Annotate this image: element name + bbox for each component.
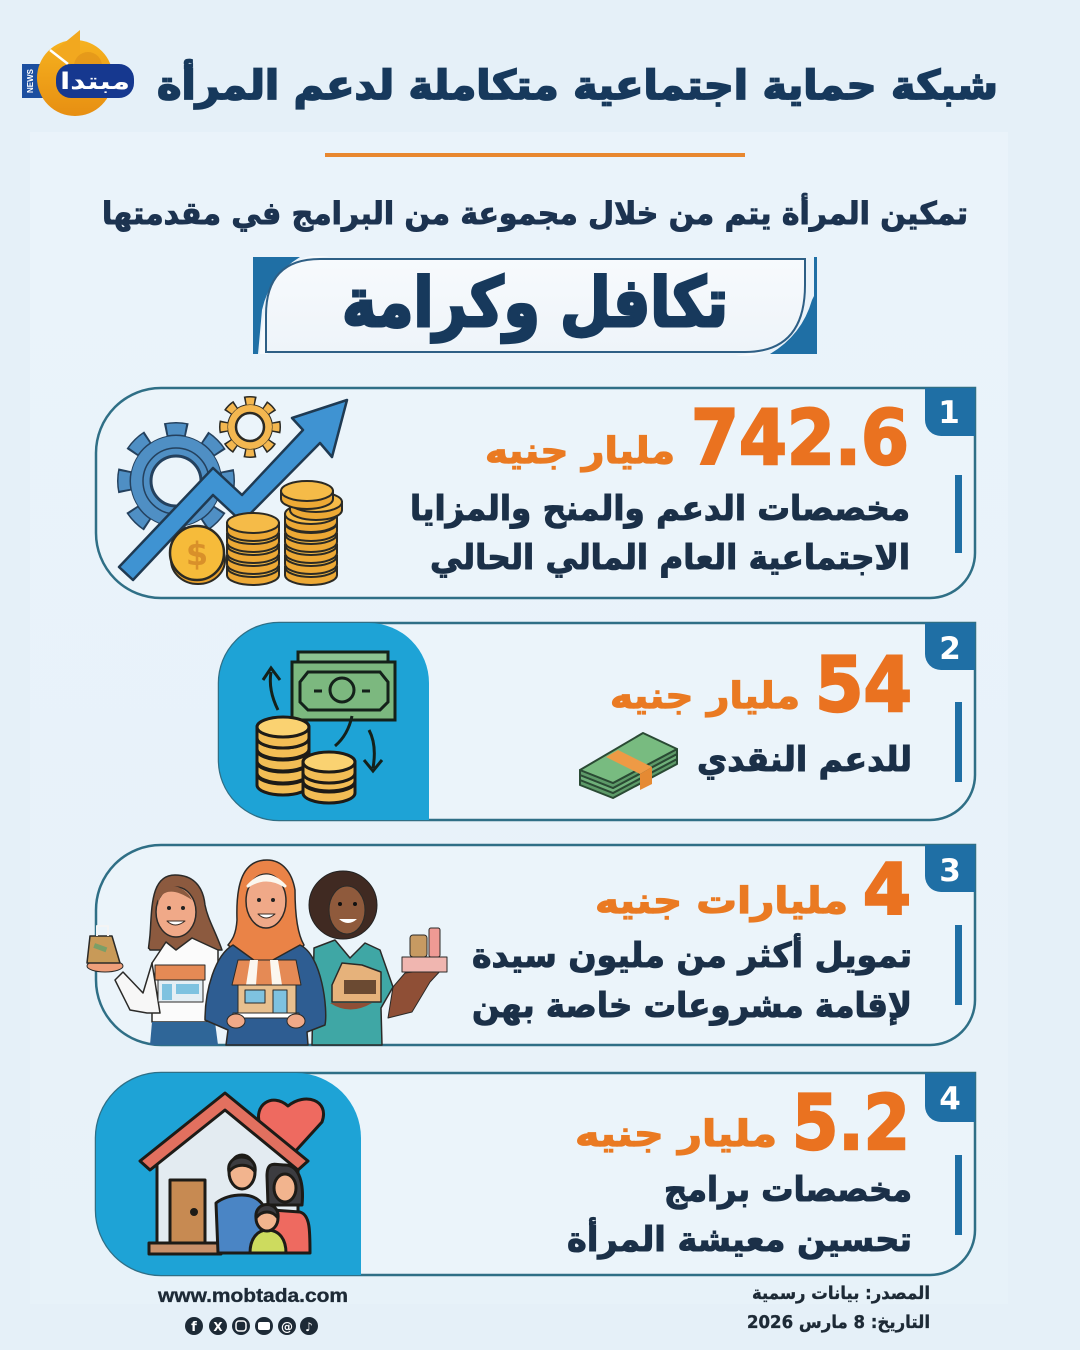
unit label: مليار جنيه	[610, 676, 800, 717]
number tab 4: 4	[939, 1081, 961, 1117]
social icons: ♪	[305, 1320, 313, 1334]
social icons: @	[281, 1320, 293, 1334]
panel: card 1	[96, 388, 975, 598]
description: للدعم النقدي	[697, 740, 912, 780]
description line 2: لإقامة مشروعات خاصة بهن	[472, 986, 912, 1026]
description line 2: الاجتماعية العام المالي الحالي	[430, 538, 910, 578]
description line 1: مخصصات برامج	[664, 1170, 912, 1210]
icon: cash and coins	[257, 652, 395, 803]
source note: المصدر: بيانات رسمية	[752, 1283, 930, 1304]
title: شبكة حماية اجتماعية متكاملة لدعم المرأة	[157, 59, 998, 109]
banner: program name	[253, 256, 817, 356]
social icons: X	[213, 1320, 223, 1334]
center light panel	[30, 132, 1008, 1304]
panel: card 2	[219, 623, 975, 820]
figure 742.6: 742.6	[691, 393, 909, 482]
figure 54: 54	[815, 640, 912, 729]
website url: www.mobtada.com	[157, 1286, 348, 1307]
date note: التاريخ: 8 مارس 2026	[747, 1312, 930, 1333]
number tab 1	[925, 388, 975, 436]
subtitle: تمكين المرأة يتم من خلال مجموعة من البرامج في مقدمتها	[102, 193, 968, 232]
unit label: مليار جنيه	[575, 1114, 777, 1155]
description line 1: مخصصات الدعم والمنح والمزايا	[410, 489, 910, 529]
banner: program name: تكافل وكرامة	[342, 264, 728, 343]
icon: gears, arrow and coins: $	[186, 535, 208, 573]
side accent	[955, 1155, 962, 1235]
unit label: مليار جنيه	[485, 431, 675, 472]
side accent	[955, 925, 962, 1005]
number tab 4	[925, 1073, 975, 1122]
description line 2: تحسين معيشة المرأة	[567, 1217, 912, 1260]
blue icon tile	[219, 623, 429, 820]
social icons: f	[191, 1320, 197, 1335]
number tab 3: 3	[939, 853, 961, 889]
icon: gears, arrow and coins	[119, 400, 347, 585]
unit label: مليارات جنيه	[595, 881, 848, 922]
woman left	[87, 875, 222, 1045]
woman centre	[205, 860, 326, 1045]
icon: family home with heart	[140, 1093, 324, 1254]
social icons	[185, 1317, 318, 1335]
panel: card 3	[87, 845, 975, 1045]
panel: card 4	[96, 1073, 975, 1275]
description line 1: تمويل أكثر من مليون سيدة	[472, 933, 912, 976]
illustration: three women entrepreneurs	[87, 860, 447, 1045]
figure 5.2: 5.2	[792, 1078, 910, 1167]
number tab 2	[925, 623, 975, 670]
blue icon tile	[96, 1073, 361, 1275]
logo: NEWS	[26, 68, 35, 93]
number tab 3	[925, 845, 975, 892]
title divider	[325, 153, 745, 157]
side accent	[955, 475, 962, 553]
logo: مبتدا	[60, 69, 130, 95]
side accent	[955, 702, 962, 782]
woman right	[309, 871, 447, 1045]
figure 4: 4	[863, 849, 911, 931]
number tab 2: 2	[939, 631, 961, 667]
icon: money stack	[580, 733, 677, 798]
number tab 1: 1	[938, 395, 960, 431]
logo	[22, 30, 134, 116]
